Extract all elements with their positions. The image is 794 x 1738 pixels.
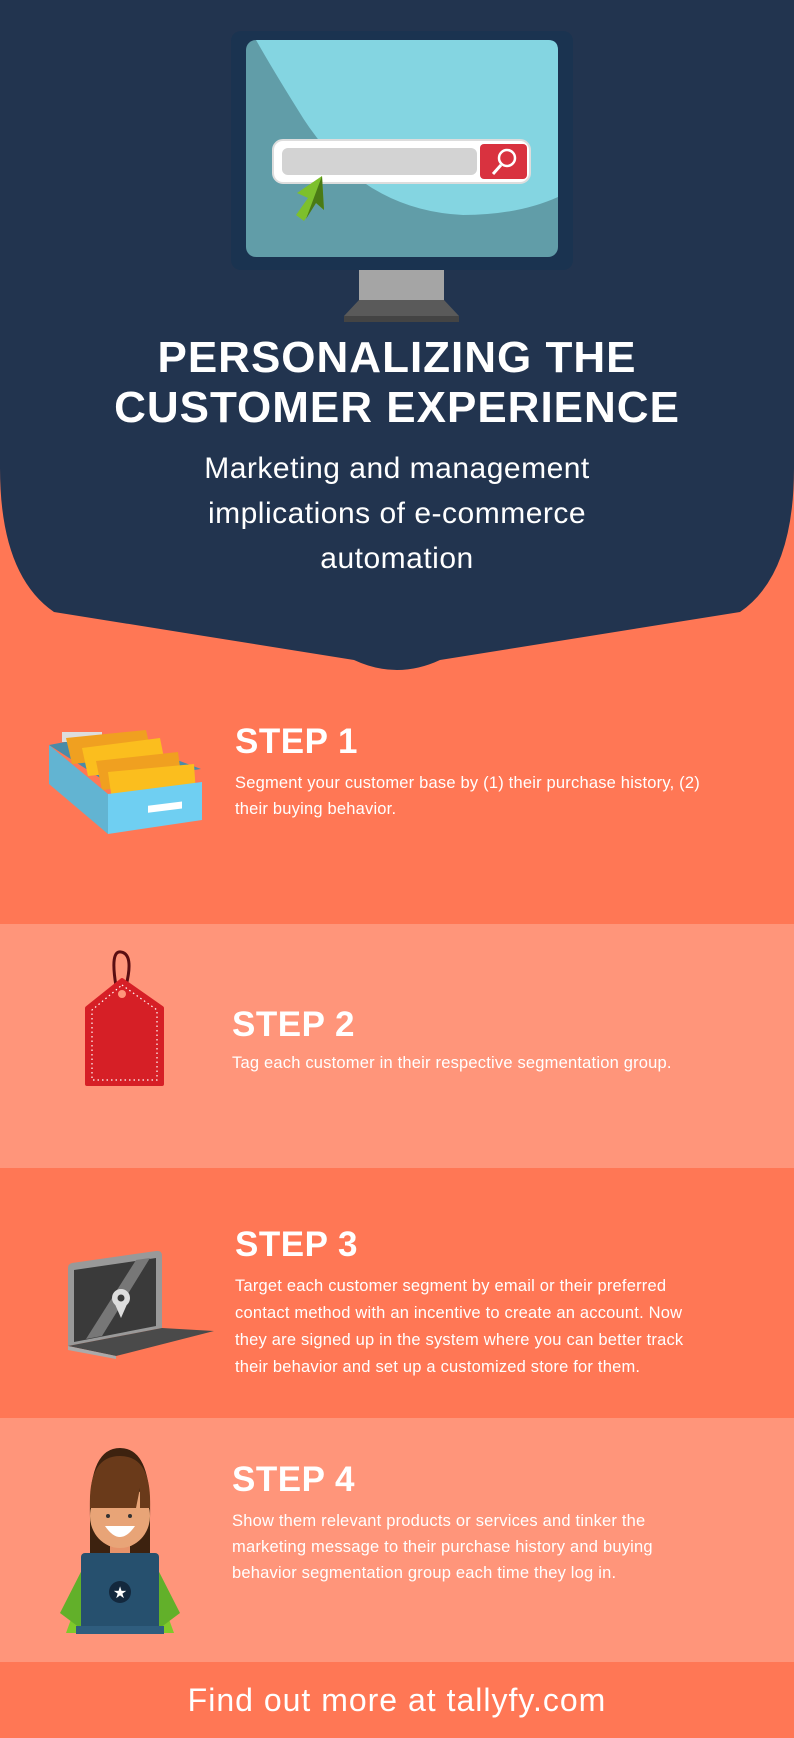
step 1 text: their buying behavior. (235, 800, 396, 818)
icon: woman with laptop (60, 1448, 180, 1634)
step 1 text (235, 774, 700, 818)
step 4 heading: STEP 4 (232, 1460, 355, 1499)
step 4 text: marketing message to their purchase history and buying (232, 1538, 653, 1556)
step 3 text: their behavior and set up a customized store for them. (235, 1358, 640, 1376)
icon: price tag (85, 950, 164, 1086)
step 1 text: Segment your customer base by (1) their purchase history, (2) (235, 774, 700, 792)
icon: laptop (68, 1250, 214, 1359)
step 1 heading: STEP 1 (235, 722, 358, 761)
footer: Find out more at tallyfy.com (188, 1682, 606, 1718)
step 4 text: behavior segmentation group each time they log in. (232, 1564, 616, 1582)
step 3 text (235, 1277, 684, 1376)
title: PERSONALIZING THE (157, 333, 637, 382)
step 3 heading: STEP 3 (235, 1225, 358, 1264)
icon: woman with laptop: ★ (113, 1583, 127, 1602)
header navy shape (0, 0, 794, 670)
icon: file drawer (49, 730, 202, 834)
title: CUSTOMER EXPERIENCE (114, 383, 680, 432)
step 2 text: Tag each customer in their respective segmentation group. (232, 1054, 672, 1072)
step 4 text: Show them relevant products or services and tinker the (232, 1512, 645, 1530)
subtitle: automation (320, 542, 474, 575)
subtitle: implications of e-commerce (208, 497, 586, 530)
subtitle: Marketing and management (204, 452, 590, 485)
step 4 text (232, 1512, 653, 1582)
step 3 text: they are signed up in the system where you can better track (235, 1331, 683, 1349)
icon: monitor (232, 36, 572, 322)
step 3 text: contact method with an incentive to create an account. Now (235, 1304, 682, 1322)
subtitle (204, 452, 590, 575)
step 3 text: Target each customer segment by email or their preferred (235, 1277, 666, 1295)
step 1 (235, 722, 700, 818)
title (114, 333, 680, 432)
step 3 (235, 1225, 684, 1376)
step 2 (232, 1005, 672, 1072)
step 2 heading: STEP 2 (232, 1005, 355, 1044)
step 4 (232, 1460, 653, 1582)
